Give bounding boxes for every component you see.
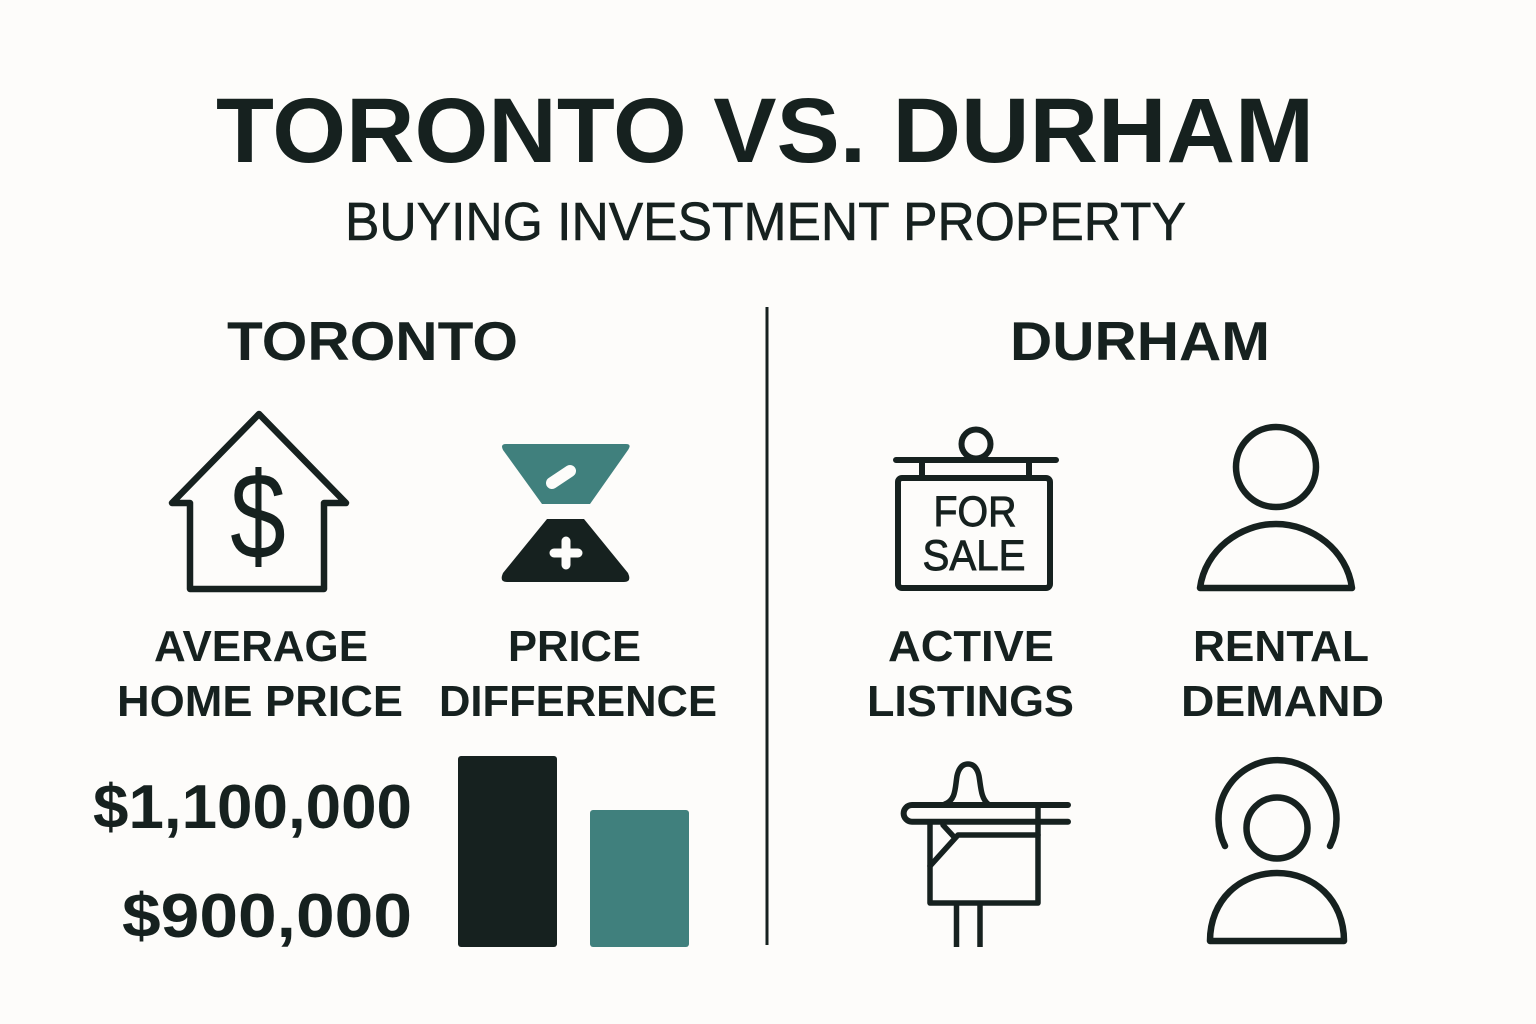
icon: house with dollar sign: $ [230,446,286,585]
label: average home price: HOME PRICE [117,677,403,726]
label: rental demand [1181,622,1384,726]
icon: for sale sign: SALE [922,532,1026,580]
subtitle: BUYING INVESTMENT PROPERTY [345,192,1186,252]
panel: Durham [867,310,1384,947]
label: price difference: DIFFERENCE [439,677,717,726]
icon: house with dollar sign [172,414,346,589]
bar chart [458,756,689,947]
central divider [766,307,768,945]
title: TORONTO VS. DURHAM [216,80,1314,182]
label: average home price [117,622,403,726]
label: active listings: LISTINGS [867,677,1074,726]
label: rental demand: DEMAND [1181,677,1384,726]
label: average home price: AVERAGE [154,622,368,671]
icon: person [1200,427,1352,588]
label: rental demand: RENTAL [1193,622,1369,671]
heading: Durham: DURHAM [1010,310,1270,372]
panel: Toronto [93,310,717,951]
icon: for sale sign: FOR [934,488,1016,536]
value: $900,000: $900,000 [122,882,412,951]
heading: Toronto: TORONTO [227,310,518,372]
label: price difference: PRICE [508,622,641,671]
icon: for sale sign [896,430,1056,588]
label: price difference [439,622,717,726]
icon: listing signpost [904,764,1068,947]
value: $1,100,000: $1,100,000 [93,773,412,842]
label: active listings [867,622,1074,726]
label: active listings: ACTIVE [888,622,1054,671]
icon: price difference hourglass [502,444,630,582]
icon: person with halo [1210,760,1344,941]
